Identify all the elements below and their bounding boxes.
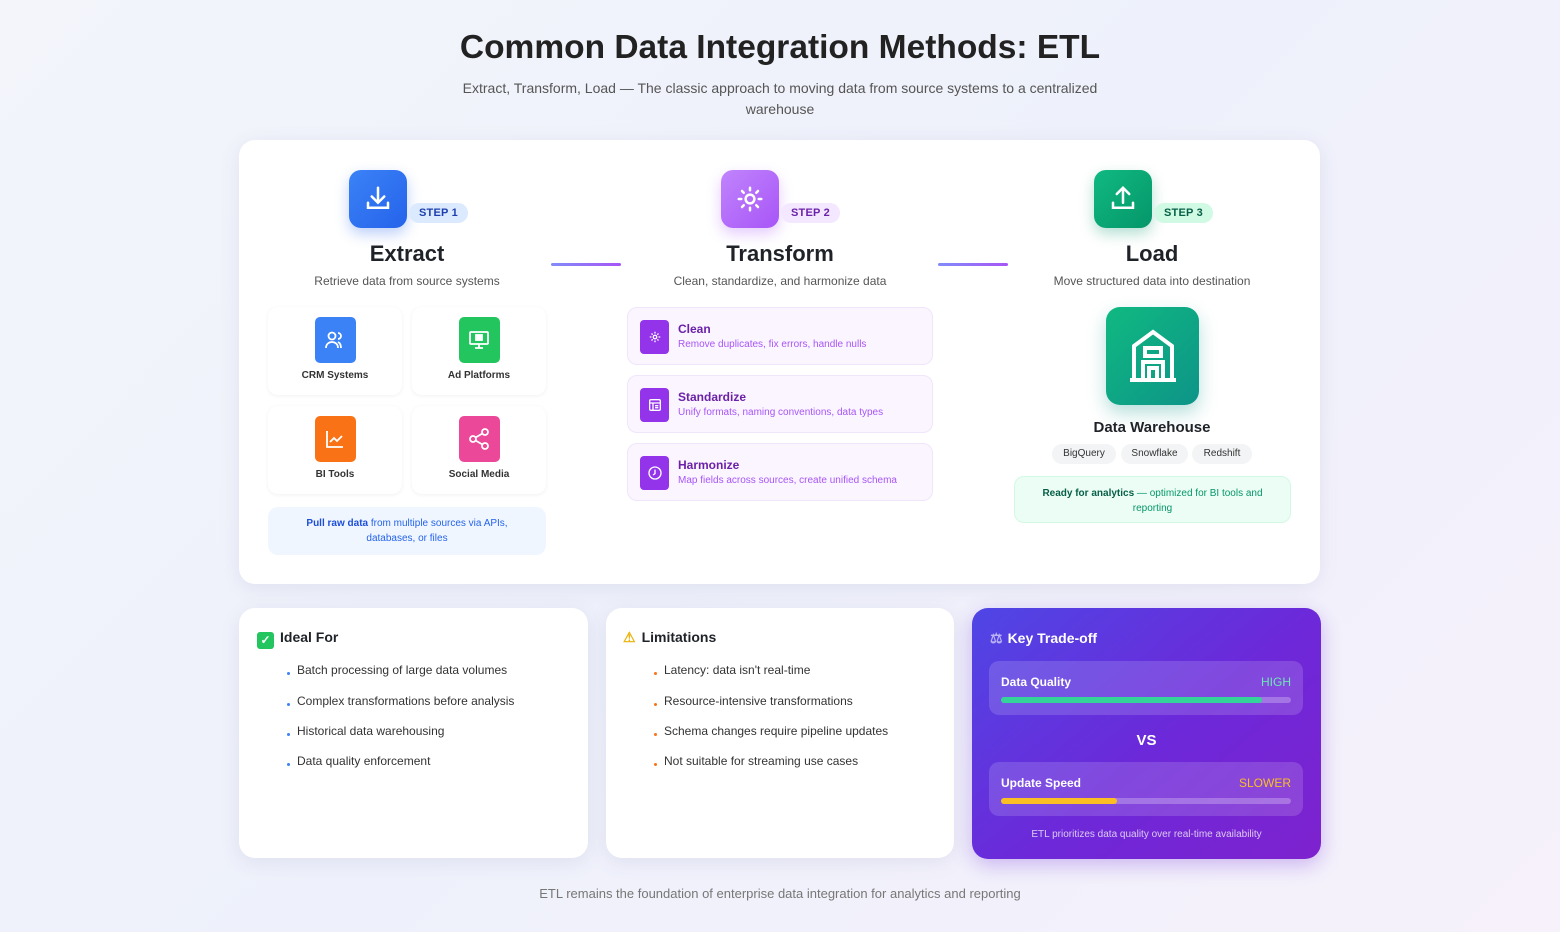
tags: warehouses [1052, 444, 1252, 464]
badge: step 3: STEP 3 [1164, 207, 1203, 219]
metric: update speed [989, 762, 1303, 816]
footer: ETL remains the foundation of enterprise data integration for analytics and reporting [539, 886, 1021, 901]
source: Social media [412, 406, 546, 494]
icon: data warehouse [1106, 307, 1199, 405]
list: ideal for: Historical data warehousing [297, 724, 444, 738]
metric: data quality: HIGH [1261, 675, 1291, 689]
icon: extract [349, 170, 407, 228]
tags: warehouses: Redshift [1204, 448, 1240, 459]
step: harmonize: Harmonize [678, 458, 739, 472]
list: ideal for: Batch processing of large data volumes [297, 663, 507, 677]
list: ideal for [287, 663, 514, 768]
heading: Transform: Transform [726, 241, 834, 266]
text: trade-off note: ETL prioritizes data quality over real-time availability [1031, 829, 1262, 840]
heading: limitations: ⚠ Limitations [623, 629, 716, 645]
tags: warehouses: Snowflake [1131, 448, 1178, 459]
source: Ad platforms: Ad Platforms [448, 370, 510, 381]
list: limitations: Not suitable for streaming use cases [664, 754, 858, 768]
title: Common Data Integration Methods: ETL [460, 29, 1100, 66]
icon: transform [721, 170, 779, 228]
callout: load: Ready for analytics — optimized for BI tools and [1042, 488, 1263, 499]
source: CRM: CRM Systems [302, 370, 368, 381]
list: ideal for: Data quality enforcement [297, 754, 430, 768]
heading: ideal for: ✓ [260, 633, 271, 647]
icon: load [1094, 170, 1152, 228]
heading: Load: Load [1126, 241, 1178, 266]
step: clean: Clean [678, 322, 711, 336]
list: limitations: Schema changes require pipeline updates [664, 724, 888, 738]
badge: step 1: STEP 1 [419, 207, 458, 219]
step: harmonize [627, 443, 933, 501]
step: clean [627, 307, 933, 365]
panel: key trade-off [972, 608, 1321, 859]
heading: key trade-off: ⚖ Key Trade-off [990, 630, 1097, 646]
callout: extract: Pull raw data from multiple sources via APIs, [306, 518, 508, 529]
step: clean: Remove duplicates, fix errors, handle nulls [678, 339, 866, 350]
badge: step 2 [781, 203, 840, 223]
metric: data quality [989, 661, 1303, 715]
badge: step 1 [409, 203, 468, 223]
heading: Extract: Extract [370, 241, 444, 266]
text: transform description: Clean, standardize, and harmonize data [674, 274, 886, 288]
list: ideal for: Complex transformations before analysis [297, 694, 514, 708]
badge: step 2: STEP 2 [791, 207, 830, 219]
heading: ideal for: Ideal For [280, 629, 338, 645]
text: load description: Move structured data into destination [1054, 274, 1250, 288]
source: Social media: Social Media [449, 469, 509, 480]
badge: step 3 [1154, 203, 1213, 223]
heading: ideal for [257, 629, 338, 649]
step: standardize: Standardize [678, 390, 746, 404]
step: harmonize: Map fields across sources, create unified schema [678, 475, 897, 486]
source: Ad platforms [412, 307, 546, 395]
metric: update speed: SLOWER [1239, 776, 1291, 790]
callout: extract: databases, or files [366, 533, 448, 544]
tags: warehouses: BigQuery [1063, 448, 1105, 459]
panel: ideal for [239, 608, 588, 858]
callout: load: reporting [1133, 503, 1172, 514]
step: standardize: Unify formats, naming conventions, data types [678, 407, 883, 418]
list: limitations [654, 663, 888, 768]
arrow: extract to transform [551, 263, 621, 266]
callout: extract [268, 507, 546, 555]
metric: data quality: Data Quality [1001, 675, 1071, 689]
list: limitations: Latency: data isn't real-time [664, 663, 810, 677]
panel: ETL pipeline [239, 140, 1320, 584]
callout: load [1014, 476, 1291, 523]
source: BI tools [268, 406, 402, 494]
metric: update speed: Update Speed [1001, 776, 1081, 790]
step: standardize [627, 375, 933, 433]
source: CRM [268, 307, 402, 395]
heading: data warehouse: Data Warehouse [1094, 419, 1210, 436]
source: BI tools: BI Tools [316, 469, 354, 480]
subtitle: Extract, Transform, Load — The classic approach to moving data from source systems to a centralized warehouse [463, 80, 1097, 117]
arrow: transform to load [938, 263, 1008, 266]
text: extract description: Retrieve data from source systems [314, 274, 500, 288]
text: vs: VS [1136, 732, 1156, 749]
panel: limitations [606, 608, 954, 858]
list: limitations: Resource-intensive transformations [664, 694, 853, 708]
